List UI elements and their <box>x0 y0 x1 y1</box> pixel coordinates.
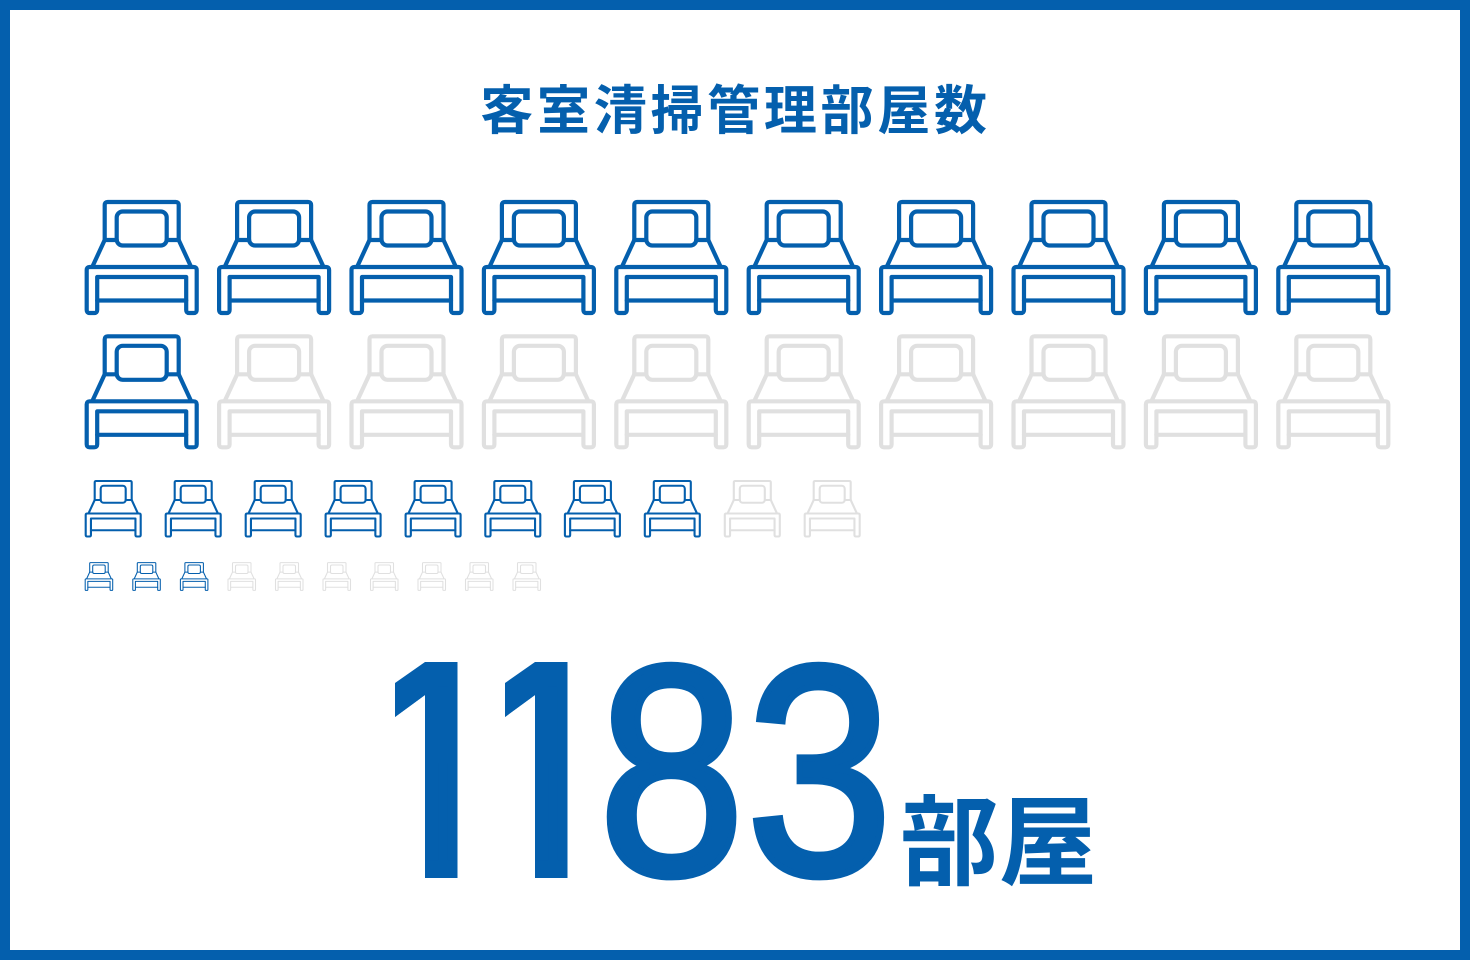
bed 7 <box>881 202 991 313</box>
medium bed 10 grey <box>805 481 860 536</box>
row 3: medium beds, eight filled and two grey <box>86 481 860 536</box>
bed 2 <box>219 202 329 313</box>
big number 1183: 3 <box>746 603 893 938</box>
bed 6 grey <box>749 336 859 447</box>
small bed 5 grey <box>276 563 303 590</box>
unit label 部屋: 部屋 <box>900 788 1097 898</box>
big number 1183: 1 <box>363 608 510 939</box>
bed 10 <box>1278 202 1388 313</box>
medium bed 8 <box>645 481 700 536</box>
bed 3 grey <box>352 336 462 447</box>
row 4: small beds, three filled and seven grey <box>85 563 540 590</box>
bed 8 grey <box>1014 336 1124 447</box>
small bed 8 grey <box>418 563 446 590</box>
small bed 6 grey <box>323 563 350 590</box>
big number 1183: 1 <box>473 608 621 939</box>
bed 5 <box>616 202 726 313</box>
big number 1183: 8 <box>598 603 745 938</box>
bed 8 <box>1014 202 1124 313</box>
medium bed 4 <box>326 481 381 536</box>
big number 1183 <box>395 662 884 880</box>
bed 2 grey <box>219 336 329 447</box>
medium bed 5 <box>406 481 461 536</box>
medium bed 9 grey <box>725 481 780 536</box>
bed 6 <box>749 202 859 313</box>
medium bed 2 <box>166 481 221 536</box>
bed 7 grey <box>881 336 991 447</box>
bed 9 grey <box>1146 336 1256 447</box>
small bed 4 grey <box>228 563 256 590</box>
bed 9 <box>1146 202 1256 313</box>
bed 10 grey <box>1278 336 1388 447</box>
bed 3 <box>352 202 462 313</box>
title: 客室清掃管理部屋数 <box>480 82 991 141</box>
bed 4 <box>484 202 594 313</box>
bed 1 filled <box>87 336 197 447</box>
infographic artwork <box>84 200 1390 886</box>
bed 1 <box>87 202 197 313</box>
small bed 9 grey <box>466 563 493 590</box>
bed 5 grey <box>616 336 726 447</box>
bed 4 grey <box>484 336 594 447</box>
small bed 10 grey <box>513 563 540 590</box>
medium bed 1 <box>86 481 141 536</box>
medium bed 3 <box>246 481 301 536</box>
small bed 3 filled <box>180 563 208 590</box>
row 2: one filled and nine grey large beds <box>87 336 1388 447</box>
row 1: ten large filled beds <box>87 202 1388 313</box>
medium bed 6 <box>485 481 540 536</box>
small bed 7 grey <box>370 563 398 590</box>
small bed 1 filled <box>85 563 113 590</box>
small bed 2 filled <box>133 563 160 590</box>
medium bed 7 <box>565 481 620 536</box>
